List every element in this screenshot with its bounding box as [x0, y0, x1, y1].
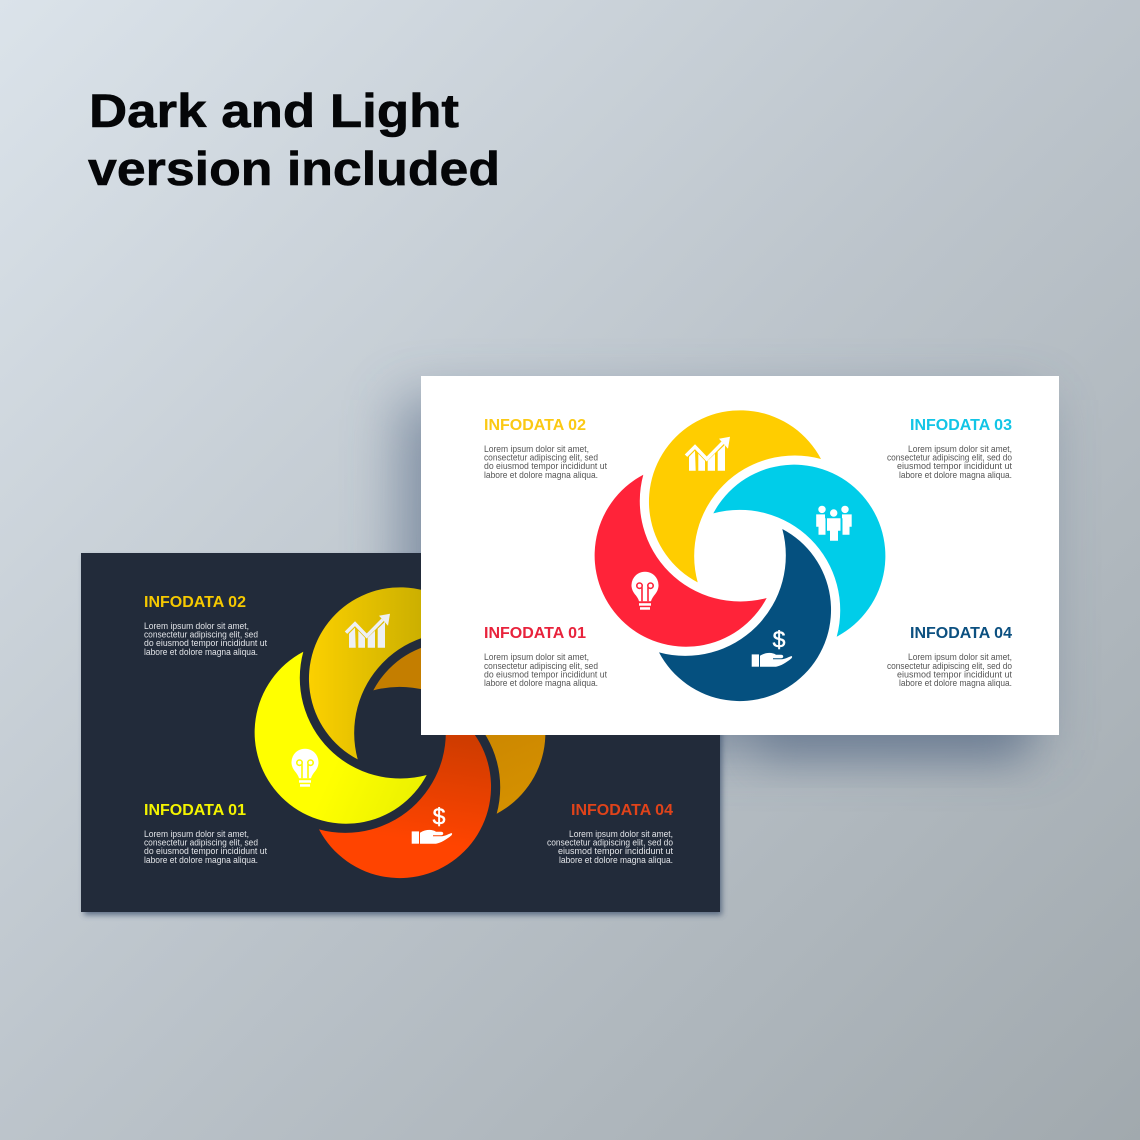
dark label 02: do eiusmod tempor incididunt ut [144, 638, 267, 649]
light label 03: labore et dolore magna aliqua. [899, 470, 1012, 481]
panel: light version [421, 376, 1059, 735]
dark label 02: Lorem ipsum dolor sit amet, [144, 621, 249, 632]
light label 04: eiusmod tempor incididunt ut [897, 670, 1012, 680]
dark label 02 [144, 594, 267, 658]
title [88, 84, 500, 195]
dark label 01 [144, 802, 267, 866]
icon: dollar in hand: $ [433, 804, 446, 830]
light label 03: INFODATA 03 [910, 417, 1012, 434]
dark swirl chart [255, 587, 545, 878]
light label 02: do eiusmod tempor incididunt ut [484, 461, 607, 472]
dark label 04: labore et dolore magna aliqua. [559, 855, 673, 866]
dark label 01: INFODATA 01 [144, 802, 246, 819]
icon: people [816, 506, 852, 541]
light label 01: do eiusmod tempor incididunt ut [484, 670, 607, 680]
light label 04 [887, 625, 1012, 689]
light label 02: Lorem ipsum dolor sit amet, [484, 444, 589, 455]
light label 01: Lorem ipsum dolor sit amet, [484, 652, 589, 663]
title: version included [88, 142, 500, 195]
light label 01: labore et dolore magna aliqua. [484, 678, 598, 689]
dark label 01: do eiusmod tempor incididunt ut [144, 846, 267, 857]
dark label 01: consectetur adipiscing elit, sed [144, 838, 258, 848]
light label 01 [484, 625, 607, 689]
dark label 02: labore et dolore magna aliqua. [144, 647, 258, 658]
dark label 01: Lorem ipsum dolor sit amet, [144, 829, 249, 840]
title: Dark and Light [89, 84, 459, 137]
light label 04: labore et dolore magna aliqua. [899, 678, 1012, 689]
segment 1 red [595, 475, 767, 647]
light swirl chart [595, 410, 885, 701]
light label 01: INFODATA 01 [484, 625, 586, 642]
light label 03: consectetur adipiscing elit, sed do [887, 452, 1012, 464]
panel shadow: light version [400, 400, 1040, 760]
light label 03: Lorem ipsum dolor sit amet, [908, 444, 1012, 455]
dark label 02: consectetur adipiscing elit, sed [144, 630, 258, 640]
icon: dollar in hand: $ [773, 627, 786, 653]
dark label 04: Lorem ipsum dolor sit amet, [569, 829, 673, 840]
icon: dollar in hand [412, 804, 452, 844]
light label 02 [484, 417, 607, 481]
light label 03: eiusmod tempor incididunt ut [897, 461, 1012, 472]
light label 02: INFODATA 02 [484, 417, 586, 434]
icon: rising chart [686, 437, 730, 471]
dark label 04 [547, 802, 673, 866]
light label 02: labore et dolore magna aliqua. [484, 470, 598, 481]
dark label 04: consectetur adipiscing elit, sed do [547, 838, 673, 848]
dark segment 2 [309, 587, 481, 759]
light label 01: consectetur adipiscing elit, sed [484, 661, 598, 672]
icon: dollar in hand [752, 627, 792, 667]
dark label 01: labore et dolore magna aliqua. [144, 855, 258, 866]
segment 3 cyan [713, 465, 885, 637]
dark label 04: eiusmod tempor incididunt ut [558, 846, 673, 857]
icon: light bulb [291, 749, 319, 787]
icon: rising chart [346, 614, 390, 648]
light label 03 [887, 417, 1012, 481]
panel: dark version [81, 553, 722, 915]
segment 4 navy [659, 529, 831, 701]
light label 04: INFODATA 04 [910, 625, 1012, 642]
light label 04: Lorem ipsum dolor sit amet, [908, 652, 1012, 663]
light label 02: consectetur adipiscing elit, sed [484, 452, 598, 464]
dark segment 4 [319, 706, 491, 878]
dark label 02: INFODATA 02 [144, 594, 246, 611]
dark label 04: INFODATA 04 [571, 802, 673, 819]
dark segment 1 [255, 652, 427, 824]
dark segment 3 [373, 642, 545, 814]
icon: light bulb [631, 572, 659, 610]
segment 2 yellow [649, 410, 821, 582]
light label 04: consectetur adipiscing elit, sed do [887, 661, 1012, 672]
